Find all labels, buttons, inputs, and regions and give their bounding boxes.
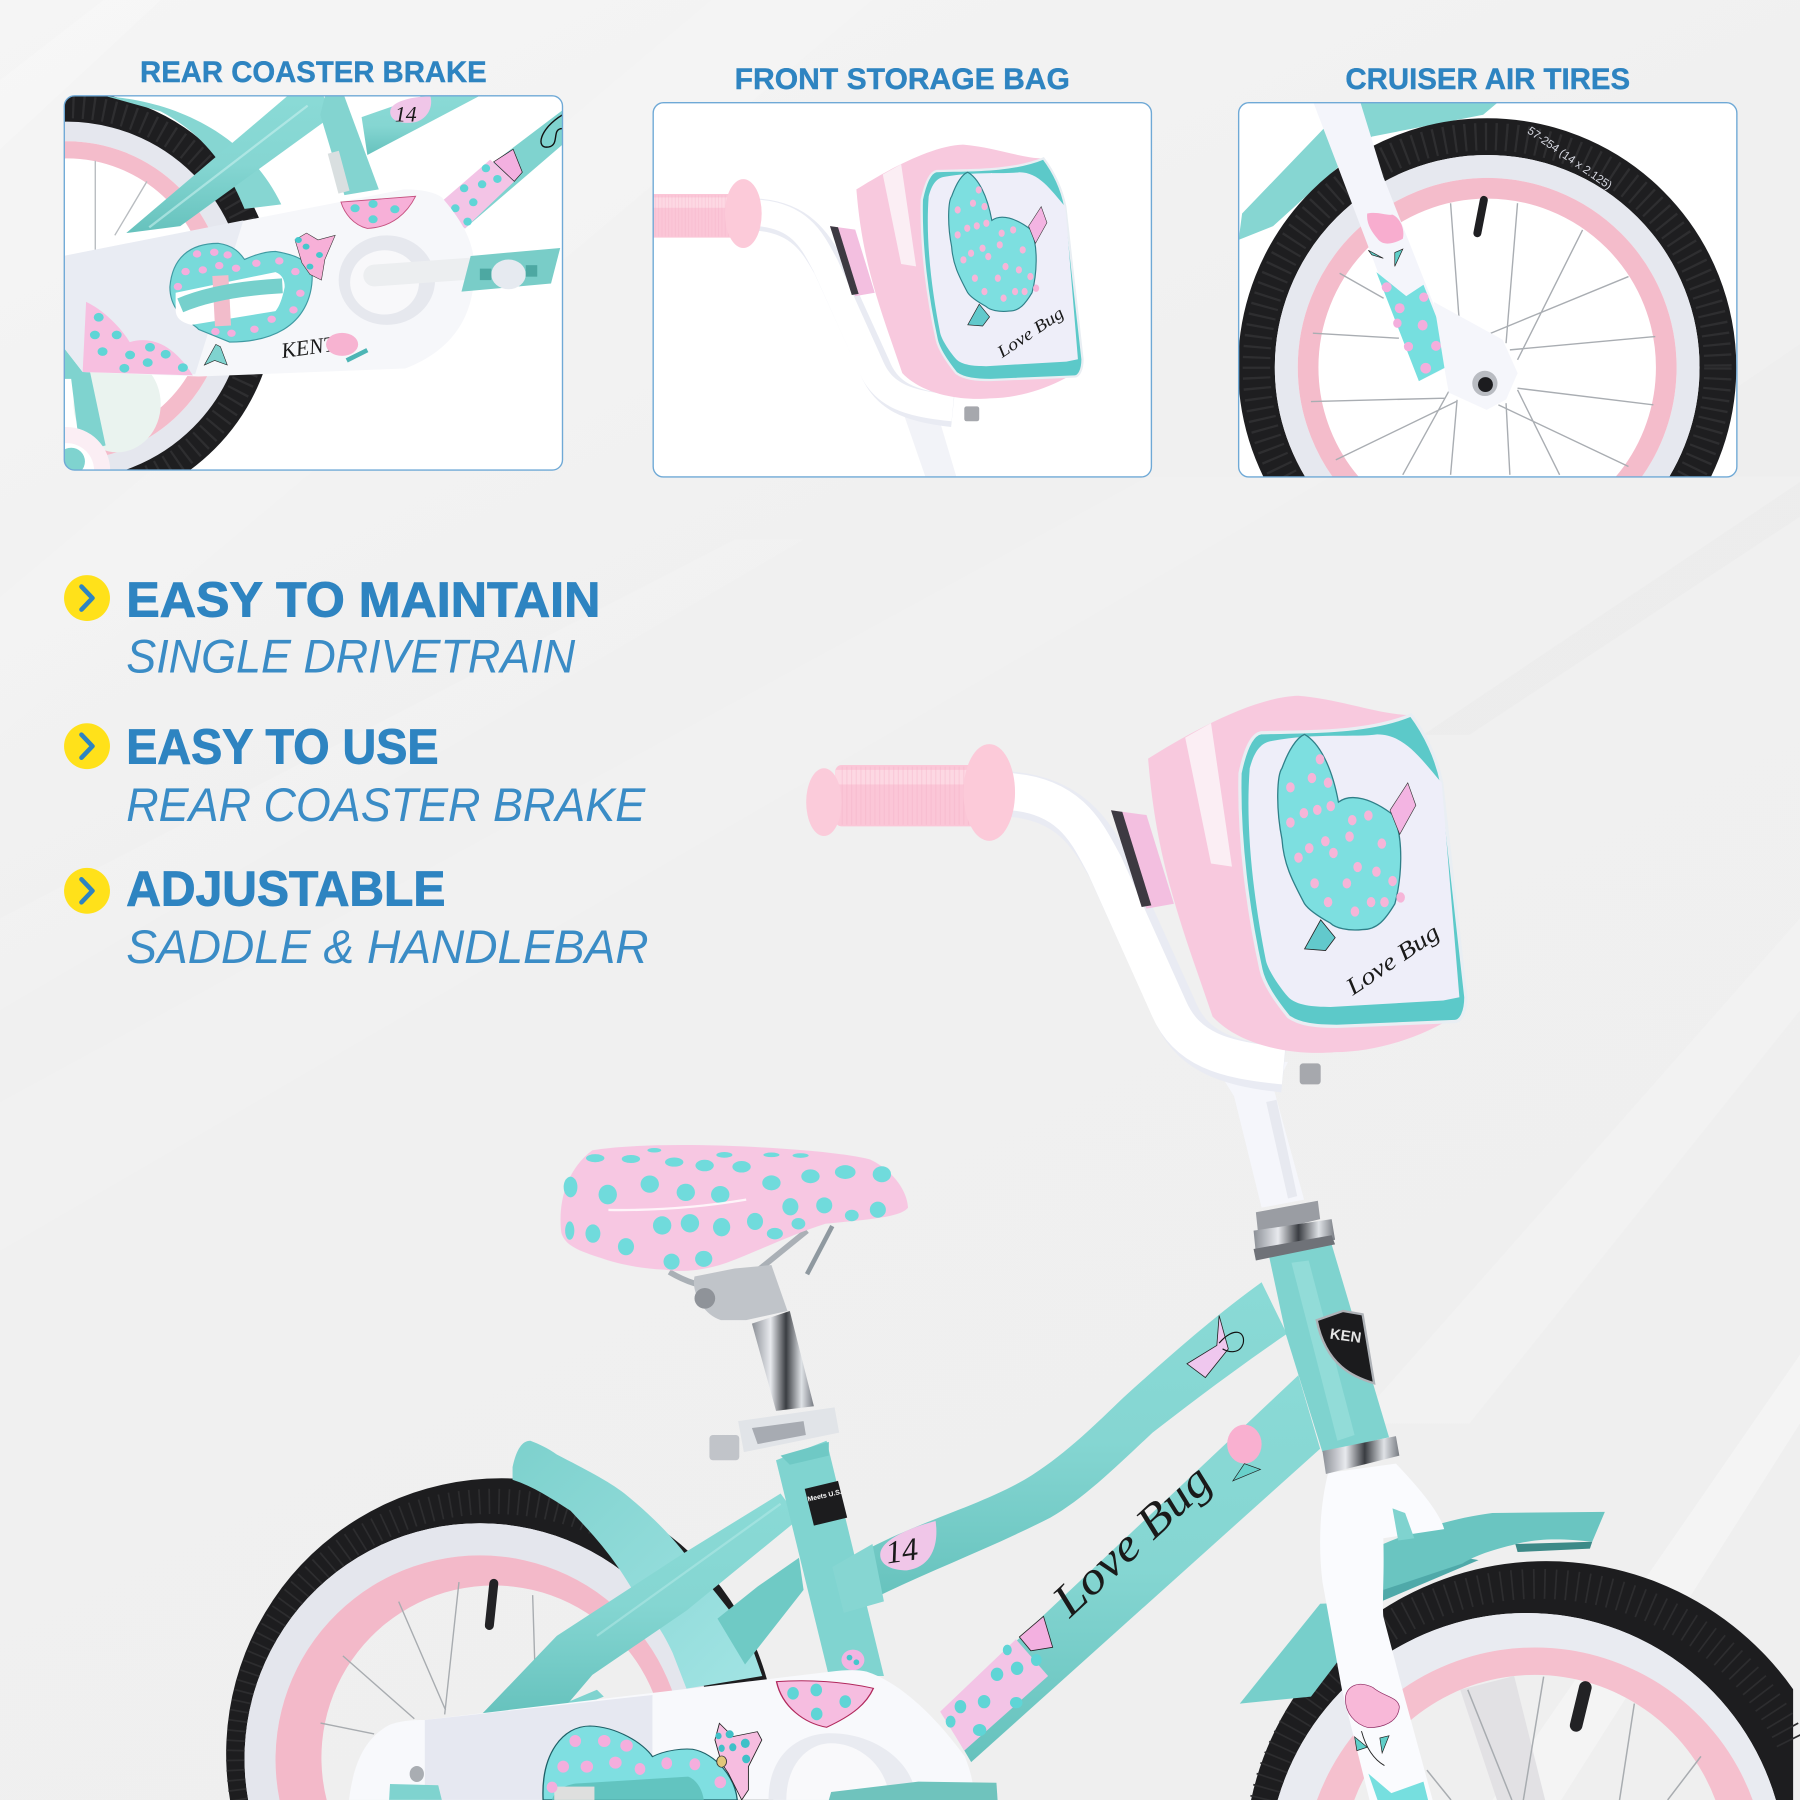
pedal and crank: [374, 248, 560, 292]
icon: yellow chevron bullet 1: [64, 575, 110, 621]
shield badge: KEN: [1329, 1326, 1362, 1347]
chain guard: KENT: [279, 332, 339, 363]
stem: [905, 418, 956, 476]
bag large: [1148, 696, 1466, 1053]
chain guard: [349, 1670, 975, 1800]
sticker on seat tube: Meets U.S.: [807, 1489, 843, 1503]
chain guard: [34, 189, 474, 377]
down tube: [941, 1375, 1320, 1762]
bag strap: [830, 226, 875, 296]
main bike photo: [226, 696, 1793, 1800]
icon: yellow chevron bullet 2: [64, 723, 110, 769]
decal: 14: 14: [395, 103, 417, 127]
down tube: [462, 110, 562, 228]
fork: [1320, 1464, 1444, 1800]
seat cluster joint: [832, 1544, 884, 1613]
feature 1: [64, 572, 600, 683]
grip large: [806, 744, 1015, 841]
feature 2: [64, 719, 646, 831]
headset nuts: [1254, 1201, 1335, 1260]
bag bolt large: [1300, 1063, 1321, 1084]
subheading: rear coaster brake: REAR COASTER BRAKE: [126, 778, 646, 831]
feature list: [64, 572, 649, 973]
sidewall text: 57-254 (14 x 2.125): [1525, 125, 1614, 192]
top tube: [362, 96, 479, 155]
decal: love bug script on down tube: Love Bug: [1041, 1454, 1221, 1627]
heading: easy to maintain: EASY TO MAINTAIN: [126, 572, 600, 627]
chain stay: [717, 1558, 804, 1665]
decal: 14 badge: [880, 1521, 936, 1570]
saddle: [561, 1145, 908, 1271]
fender: [107, 96, 281, 209]
tire: [1239, 118, 1736, 476]
seat post: [752, 1311, 814, 1411]
front fender: [1240, 1512, 1605, 1704]
fork: [1313, 102, 1518, 410]
decal: 14 badge: 14: [883, 1530, 920, 1570]
front fender: [1239, 102, 1498, 240]
fork brace: [1460, 1676, 1545, 1800]
head tube: [1268, 1244, 1389, 1452]
heading: front storage bag: FRONT STORAGE BAG: [735, 64, 1070, 96]
decal: apple on down tube: [1227, 1425, 1262, 1481]
grip: [654, 179, 762, 248]
ladybug decal: [777, 1681, 873, 1727]
bolt: [964, 406, 979, 421]
handlebar stem: [1213, 1062, 1304, 1208]
handlebar: [758, 215, 953, 411]
decal: butterfly on top tube: [1187, 1316, 1244, 1378]
heading: adjustable: ADJUSTABLE: [126, 862, 445, 917]
seat clamp ring: [709, 1407, 839, 1465]
butterfly decal: [715, 1723, 762, 1800]
bag large: Love Bug: [1340, 919, 1445, 1001]
seat stay: [126, 96, 331, 233]
front wheel: [1251, 1561, 1793, 1800]
icon: yellow chevron bullet 3: [64, 868, 110, 914]
decal on seat tube: [841, 1650, 864, 1670]
heading: rear coaster brake: REAR COASTER BRAKE: [140, 57, 487, 89]
pedal: [829, 1782, 998, 1800]
heading: cruiser air tires: CRUISER AIR TIRES: [1345, 64, 1630, 96]
storage bag: [856, 145, 1083, 399]
decal: apple on fork: [1345, 1684, 1399, 1766]
sticker on seat tube: [805, 1481, 847, 1526]
heading: easy to use: EASY TO USE: [126, 719, 439, 774]
heart decal: [543, 1726, 737, 1800]
rear fender: [513, 1441, 762, 1689]
rear wheel: [226, 1478, 777, 1800]
seat tube: [776, 1441, 884, 1676]
shield badge: [1317, 1311, 1374, 1383]
panel: rear coaster brake photo: [64, 95, 564, 471]
panel: cruiser air tires photo: [1238, 102, 1738, 478]
pedal clip and bolt: [389, 1766, 442, 1800]
handlebar tube: [1009, 794, 1284, 1070]
seat stay: [481, 1493, 799, 1715]
decal: 14: [390, 96, 432, 123]
pink polka section of down tube: [940, 1616, 1053, 1751]
subheading: saddle and handlebar: SADDLE & HANDLEBAR: [126, 920, 649, 973]
feature 3: [64, 862, 649, 973]
spokes: [1311, 200, 1655, 475]
front spokes and valve: [1427, 1677, 1701, 1800]
rear wheel: [64, 96, 263, 470]
saddle rails and clamp: [669, 1226, 832, 1320]
lower headset ring: [1322, 1436, 1399, 1474]
training wheel stabiliser: [74, 372, 161, 452]
seat tube: [320, 96, 379, 195]
top tube: [862, 1282, 1287, 1601]
handlebar and storage bag (large view): [806, 696, 1466, 1084]
storage bag: Love Bug: [993, 303, 1068, 362]
subheading: single drivetrain: SINGLE DRIVETRAIN: [126, 630, 575, 683]
panel: front storage bag photo: [613, 103, 1151, 477]
bag strap large: [1111, 810, 1174, 909]
